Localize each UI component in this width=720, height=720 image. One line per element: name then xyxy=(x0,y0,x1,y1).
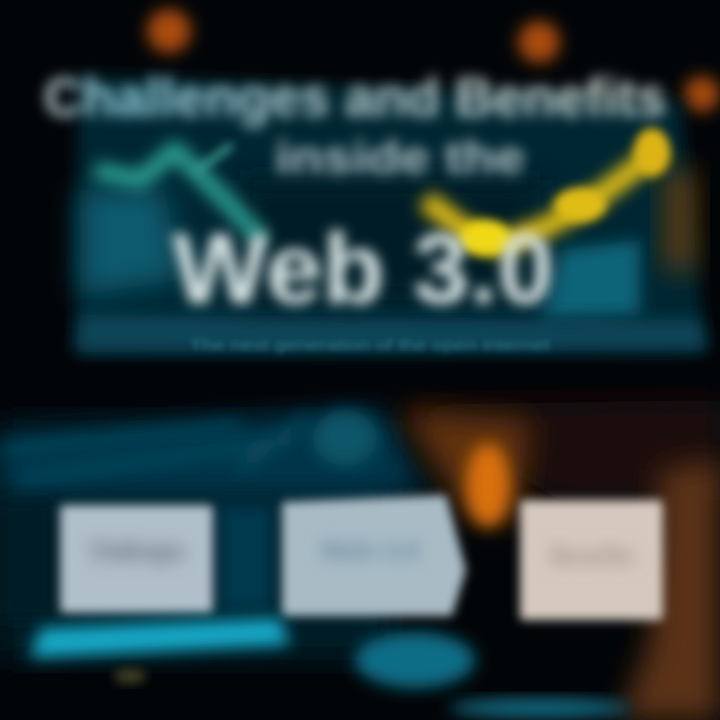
text block: card centre text: Web 3.0 xyxy=(320,535,420,566)
panel: glowing blue floor grid xyxy=(0,410,430,620)
icon: orange ceiling light right xyxy=(684,76,720,112)
text block: card right text: Benefits xyxy=(550,540,635,571)
icon: cyan ellipse pad xyxy=(355,632,475,688)
chart: yellow rising line xyxy=(425,128,670,256)
panel: card right xyxy=(520,500,663,620)
text block: screen caption: The next generation of the open internet xyxy=(190,337,551,354)
panel: cyan glowing base bar xyxy=(30,618,290,658)
heading: title line two: inside the xyxy=(275,131,525,183)
panel: card centre xyxy=(282,495,466,616)
icon: orange ceiling light centre xyxy=(518,21,560,63)
chart: teal descending line xyxy=(95,145,262,240)
panel: main screen xyxy=(44,66,706,354)
heading: Web 3.0: Web 3.0 xyxy=(172,213,554,325)
icon: orange glow behind cards xyxy=(400,410,530,527)
heading: title line one: Challenges and Benefits xyxy=(44,66,666,128)
text block: card left text: Challenges xyxy=(90,535,185,566)
icon: orange ceiling light left xyxy=(147,9,191,53)
panel: lower cyan strip xyxy=(450,699,630,717)
icon: small amber spot xyxy=(114,668,146,684)
panel: card left xyxy=(60,505,213,613)
